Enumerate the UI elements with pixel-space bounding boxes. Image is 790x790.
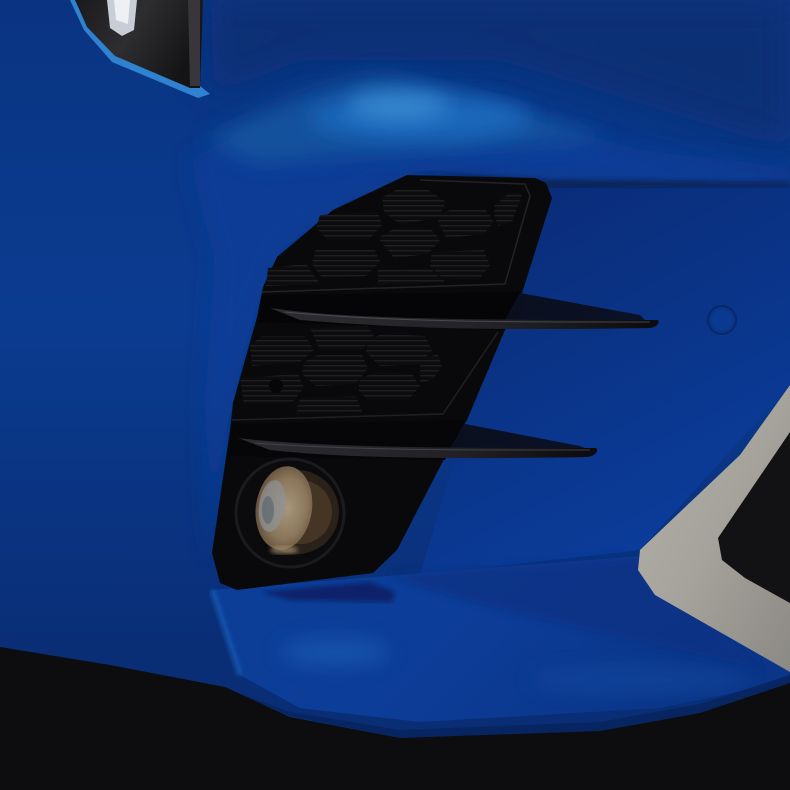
black lower bumper: [0, 647, 790, 790]
lower honeycomb mesh: [240, 326, 442, 414]
dark underside edge of blue lip: [225, 675, 790, 738]
silver grille surround: [638, 385, 790, 672]
headlight: [70, 0, 210, 98]
upper blade: [270, 293, 659, 329]
vent inner frame outline: [262, 180, 530, 292]
fog lamp: [236, 459, 344, 567]
lower blade: [238, 424, 597, 458]
black vent housing: [212, 175, 552, 590]
blade shadow bands: [258, 292, 522, 330]
body shading: [190, 0, 790, 560]
parking sensor: [708, 306, 736, 334]
right body panel: [420, 184, 790, 575]
lower grille opening: [718, 432, 790, 603]
upper honeycomb mesh: [266, 190, 522, 286]
highlight on bonnet crease: [205, 74, 610, 165]
dark shadow line above right panel: [420, 172, 790, 187]
mounting hole: [269, 379, 283, 393]
lower bumper blue lip: [212, 556, 790, 722]
